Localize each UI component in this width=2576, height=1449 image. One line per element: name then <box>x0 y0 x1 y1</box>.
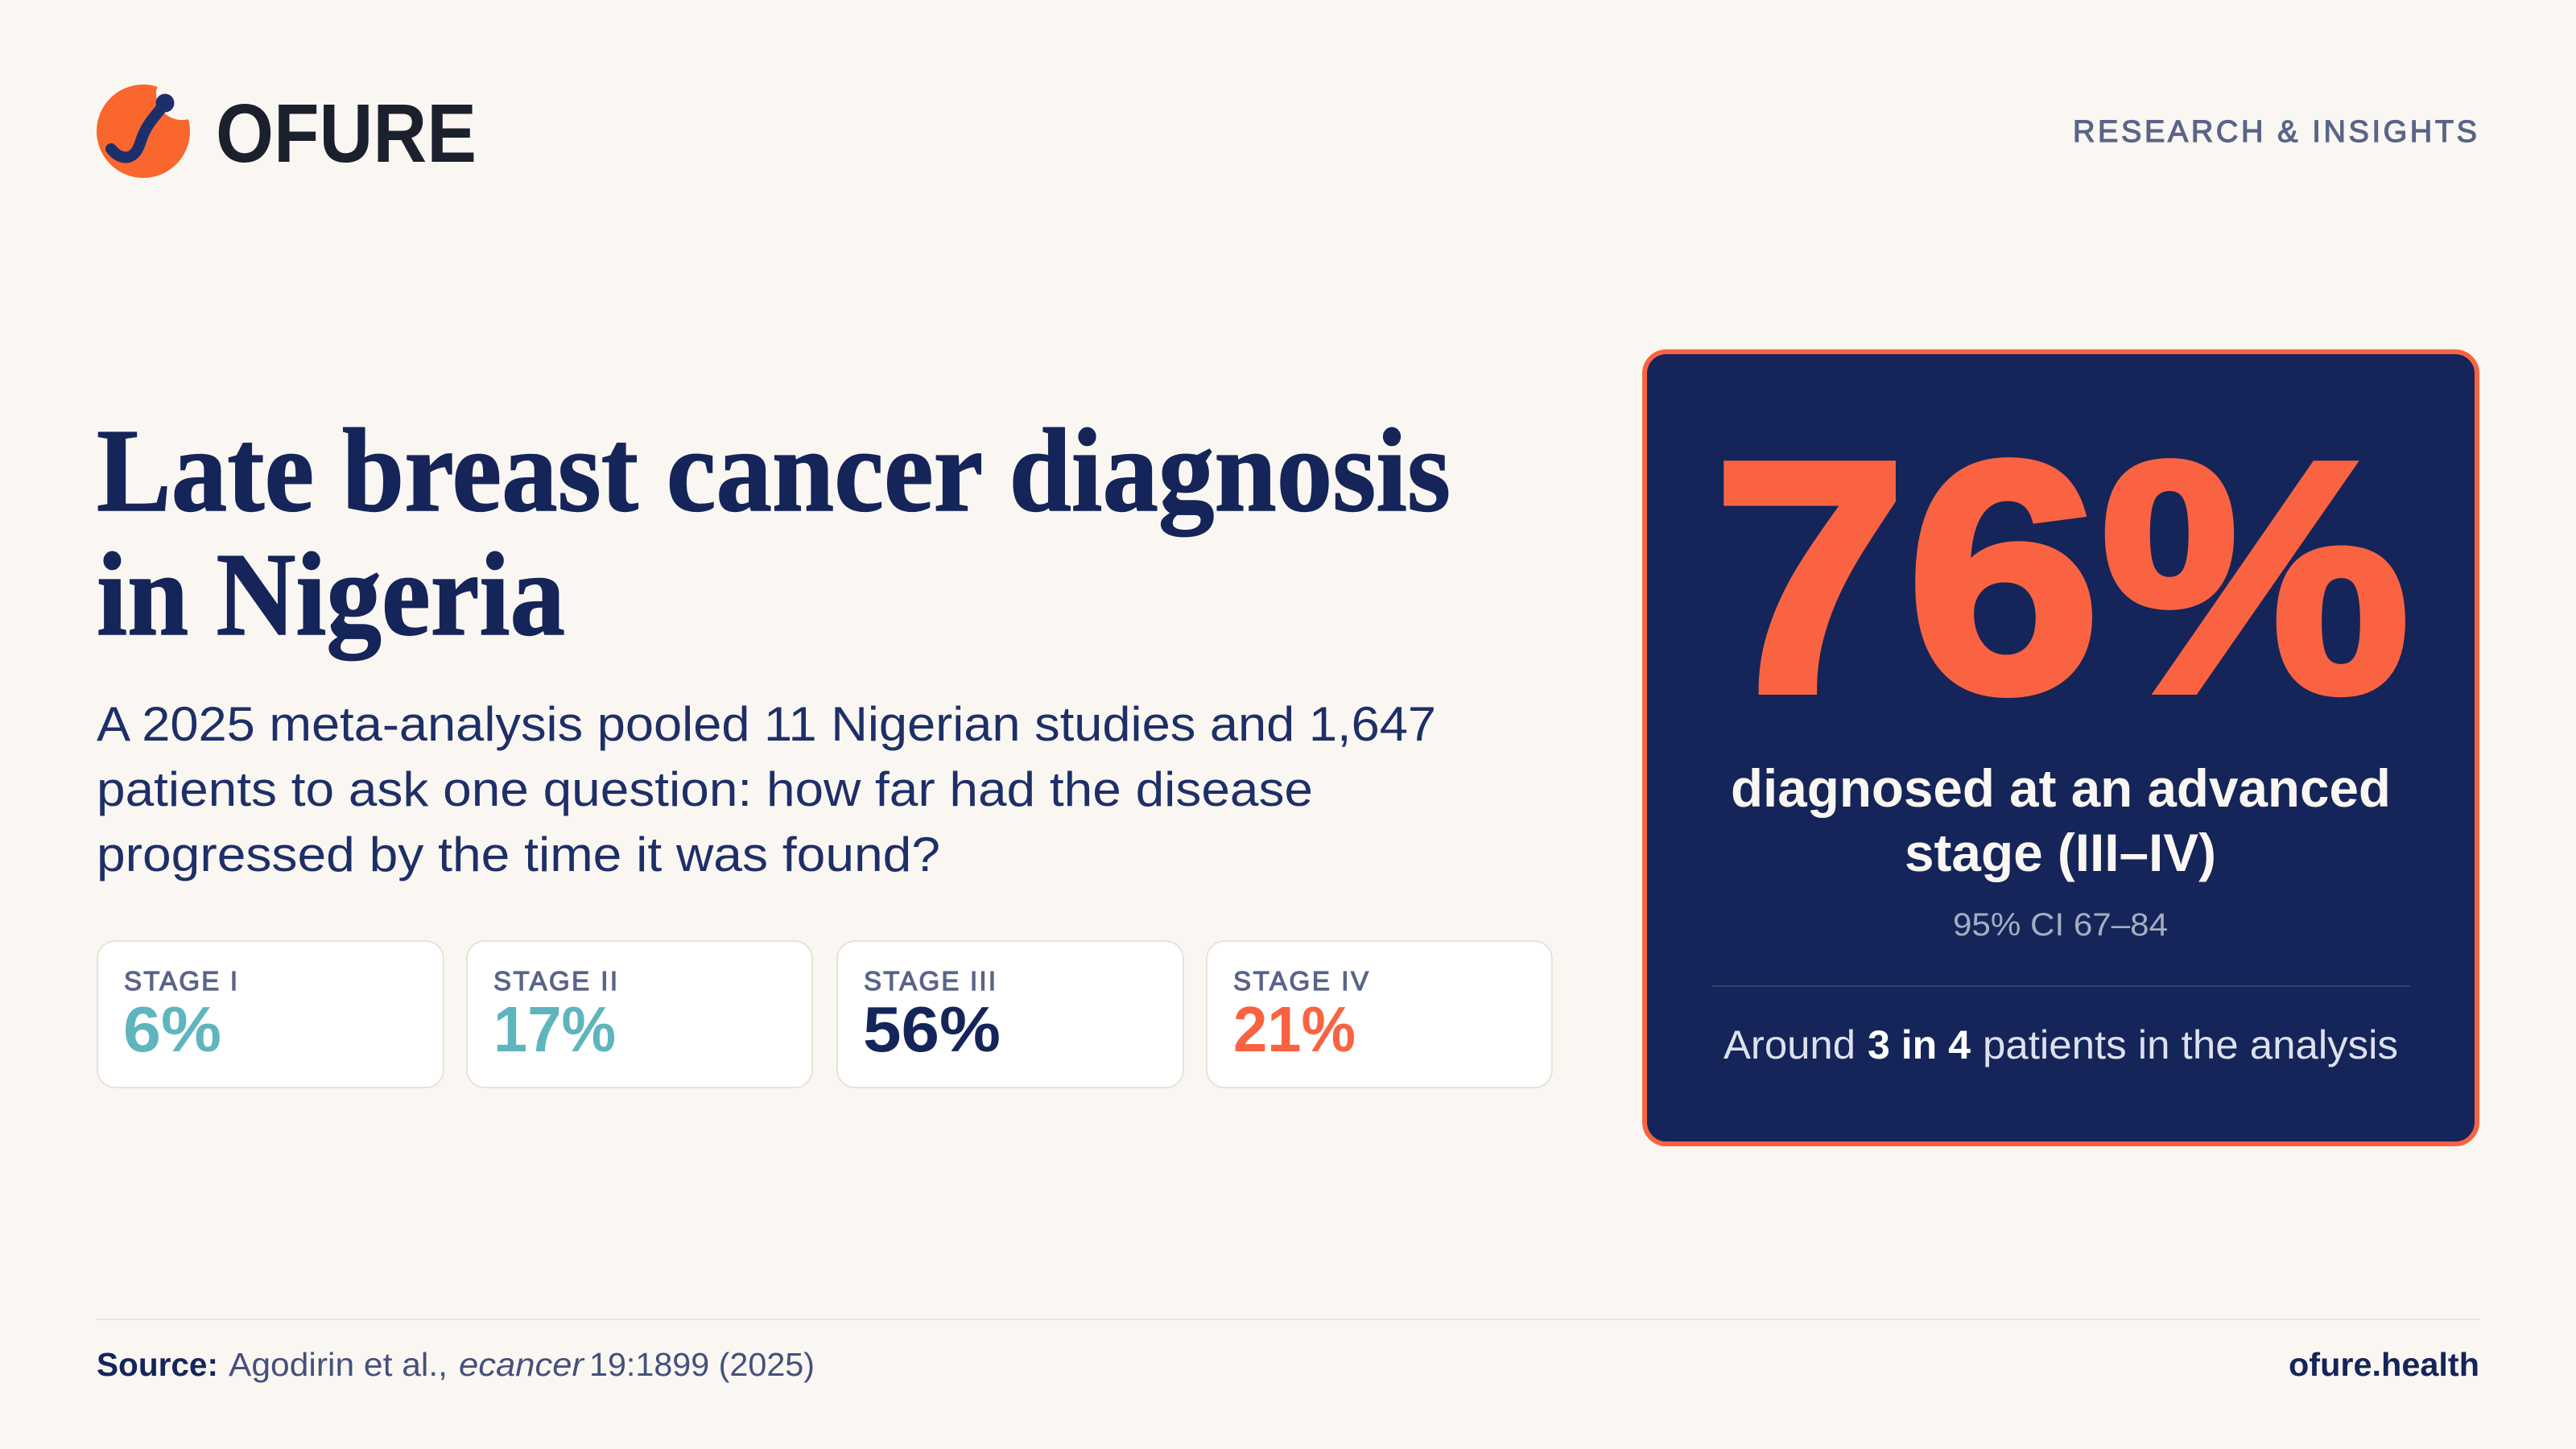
title: in Nigeria <box>97 529 565 661</box>
logo: OFURE <box>97 68 477 180</box>
panel: stage IV <box>1207 941 1552 1088</box>
panel: headline statistic <box>1645 352 2477 1144</box>
source citation: ecancer <box>459 1346 585 1383</box>
header label: RESEARCH & INSIGHTS <box>2073 115 2477 149</box>
source citation: Agodirin et al., <box>229 1346 448 1383</box>
intro paragraph: A 2025 meta-analysis pooled 11 Nigerian studies and 1,647 <box>97 697 1436 751</box>
stat caption: 3 in 4 <box>1868 1022 1971 1067</box>
stat description <box>1731 758 2391 882</box>
source citation <box>97 1346 815 1383</box>
big number 76%: 76% <box>1713 394 2410 761</box>
website: ofure.health <box>2289 1346 2479 1383</box>
intro paragraph <box>97 697 1436 881</box>
stage I value: 6% <box>123 993 221 1065</box>
stat caption <box>1724 1022 2398 1067</box>
wordmark: OFURE <box>216 87 477 180</box>
stage II label: STAGE II <box>493 966 617 996</box>
stage II value: 17% <box>493 993 616 1065</box>
stage IV value: 21% <box>1233 993 1356 1065</box>
title: Late breast cancer diagnosis <box>97 405 1451 537</box>
stat caption: patients in the analysis <box>1983 1022 2398 1067</box>
stage I label: STAGE I <box>124 966 237 996</box>
intro paragraph: patients to ask one question: how far had the disease <box>97 762 1313 816</box>
stage IV label: STAGE IV <box>1233 966 1368 996</box>
stage III label: STAGE III <box>864 966 996 996</box>
title <box>97 405 1451 661</box>
source citation: 19:1899 (2025) <box>589 1346 815 1383</box>
intro paragraph: progressed by the time it was found? <box>97 828 940 881</box>
confidence interval: 95% CI 67–84 <box>1953 907 2168 943</box>
stat description: stage (III–IV) <box>1905 823 2216 882</box>
panel: stage I <box>97 941 444 1088</box>
stat caption: Around <box>1724 1022 1856 1067</box>
panel: stage III <box>837 941 1183 1088</box>
stage III value: 56% <box>863 993 1001 1065</box>
stat description: diagnosed at an advanced <box>1731 758 2391 818</box>
source citation: Source: <box>97 1346 218 1383</box>
icon: orange circle with navy ribbon <box>97 68 208 178</box>
panel: stage II <box>467 941 812 1088</box>
